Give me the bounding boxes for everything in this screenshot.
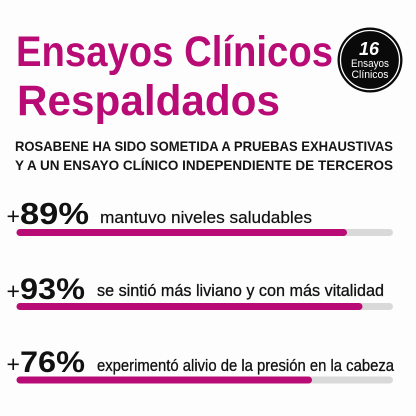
stat 3: 76%: 76% [20,346,85,379]
progress bar 93% [16,303,393,310]
title: Ensayos Clínicos [16,28,333,76]
progress bar 76% [16,376,393,384]
badge: 16 ensayos clínicos: Clínicos [352,69,389,81]
stat 3: 76%: + [6,351,20,377]
stat 1: 89%: mantuvo niveles saludables [100,208,312,227]
badge: 16 ensayos clínicos [338,28,402,92]
stat 1: 89% [6,196,393,236]
subtitle text block [15,138,393,173]
stat 1: 89%: 89% [20,196,89,231]
stat 2: 93% [6,273,393,310]
title [16,28,333,125]
stat 2: 93%: se sintió más liviano y con más vitalidad [97,282,384,300]
stat 3: 76% [6,346,395,384]
progress bar 89% [16,229,393,236]
stat 1: 89%: + [6,203,20,229]
badge: 16 ensayos clínicos: Ensayos [351,58,389,70]
subtitle text block: Y A UN ENSAYO CLÍNICO INDEPENDIENTE DE TERCEROS [15,157,393,173]
subtitle text block: ROSABENE HA SIDO SOMETIDA A PRUEBAS EXHAUSTIVAS [15,138,393,154]
title: Respaldados [17,77,280,125]
stat 2: 93%: 93% [20,273,85,306]
badge: 16 ensayos clínicos: 16 [359,39,380,59]
stat 2: 93%: + [6,278,20,304]
